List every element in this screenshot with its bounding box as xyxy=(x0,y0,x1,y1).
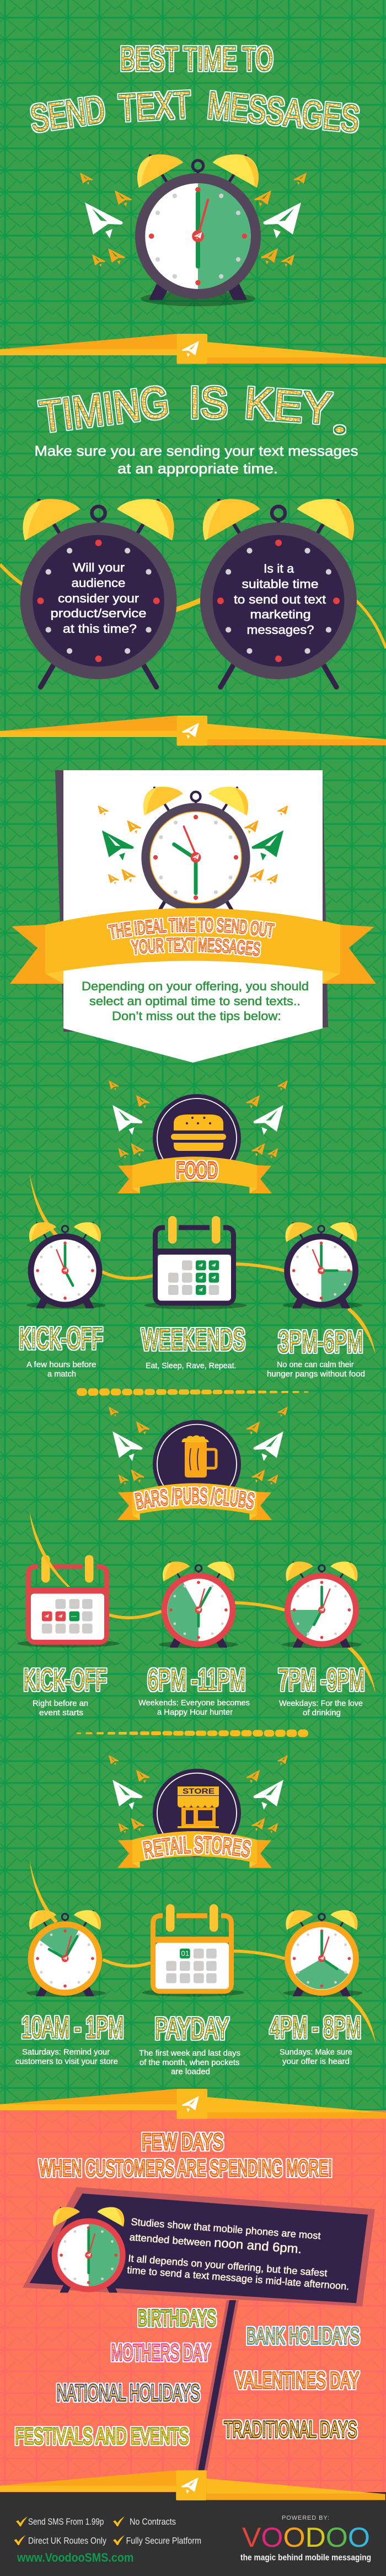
food tip: weekends xyxy=(142,1323,245,1370)
clock question text: suitable time xyxy=(242,577,319,591)
tag: national holidays: NATIONAL HOLIDAYS xyxy=(56,2380,200,2406)
bars clock three xyxy=(282,1561,362,1648)
footer xyxy=(14,2515,371,2564)
hero alarm clock with paper planes xyxy=(80,154,307,306)
heading: few days xyxy=(39,2129,332,2181)
retail tip: 10am-1pm: customers to visit your store xyxy=(15,2057,118,2066)
food tip: weekends: WEEKENDS xyxy=(142,1323,245,1356)
card body text: select an optimal time to send texts.. xyxy=(89,994,301,1008)
title xyxy=(28,40,361,140)
ribbon: food xyxy=(117,1156,272,1193)
section: retail stores xyxy=(109,1755,288,1868)
connector lines bars xyxy=(109,1603,285,1618)
card white sheet xyxy=(63,770,323,1063)
swoosh line left retail xyxy=(30,1860,58,1923)
title line two xyxy=(28,83,361,140)
ribbon label: BARS /PUBS /CLUBS xyxy=(133,1486,256,1511)
food tip: kick-off: a match xyxy=(47,1369,76,1379)
bars tip: kick-off: event starts xyxy=(39,1708,83,1718)
clock question text: audience xyxy=(72,576,126,590)
divider ribbon 2 xyxy=(0,716,386,746)
heading: timing is key xyxy=(37,377,345,441)
retail tip: 10am-1pm xyxy=(15,2011,124,2066)
retail clock one xyxy=(26,1910,106,1997)
tag: festivals and events: FESTIVALS AND EVENTS xyxy=(15,2423,189,2449)
paper plane burst xyxy=(98,806,288,884)
subtitle text: Make sure you are sending your text messages xyxy=(34,442,358,459)
tag: birthdays: BIRTHDAYS xyxy=(138,2305,216,2330)
paper plane burst xyxy=(109,1407,288,1485)
icon: store badge: STORE xyxy=(183,1786,215,1795)
swoosh line left bars xyxy=(30,1512,70,1587)
footer benefits list: Send SMS From 1.99p xyxy=(28,2516,104,2527)
ribbon label: RETAIL STORES xyxy=(141,1834,252,1860)
retail tip: 4pm-8pm: your offer is heard xyxy=(282,2057,350,2066)
clock question text: Will your xyxy=(73,561,125,574)
sign text: time to send a text message is mid-late afternoon. xyxy=(127,2264,350,2292)
swoosh line right retail xyxy=(347,1996,376,2042)
ribbon banner xyxy=(10,908,376,984)
sign text xyxy=(127,2216,350,2292)
clock question text xyxy=(51,561,147,636)
food tip: kick-off xyxy=(19,1322,103,1379)
footer benefits list: No Contracts xyxy=(130,2516,176,2527)
question clock left xyxy=(20,499,177,687)
footer benefits list: Fully Secure Platform xyxy=(126,2536,201,2546)
ribbon: bars xyxy=(117,1483,272,1520)
sign text: It all depends on your offering, but the safest xyxy=(128,2253,328,2279)
bars tip: 6pm-11pm xyxy=(138,1663,250,1717)
bars calendar xyxy=(17,1555,120,1647)
swoosh line right bars xyxy=(347,1646,376,1693)
food tip: kick-off: A few hours before xyxy=(26,1360,96,1369)
card body text: Depending on your offering, you should xyxy=(82,979,309,993)
retail tip: payday: of the month, when pockets xyxy=(140,2058,239,2067)
bars clock two xyxy=(159,1561,238,1648)
retail tip: payday: The first week and last days xyxy=(139,2049,240,2058)
clock question text: product/service xyxy=(51,606,147,620)
paper plane burst xyxy=(80,173,307,267)
bars tip: 7pm-9pm: Weekdays: For the love xyxy=(279,1699,363,1708)
food tip: kick-off: KICK-OFF xyxy=(19,1322,103,1355)
connector lines food xyxy=(102,1264,285,1278)
bars calendar: event xyxy=(71,1615,77,1618)
heading: timing is key: KEY xyxy=(243,378,334,433)
sign board frame xyxy=(23,2187,375,2306)
divider ribbon 3 xyxy=(0,2089,386,2119)
section: food xyxy=(109,1080,288,1193)
paper plane burst xyxy=(109,1755,288,1833)
signpost stake xyxy=(195,2300,239,2470)
sign text: attended between noon and 6pm. xyxy=(129,2229,302,2256)
bars tip: 7pm-9pm xyxy=(278,1663,364,1718)
clock question text: Is it a xyxy=(264,562,294,575)
swoosh line left food xyxy=(30,1174,58,1236)
retail tip: payday: are loaded xyxy=(171,2067,210,2077)
title line one: BEST TIME TO xyxy=(120,40,273,77)
sign text: Studies show that mobile phones are most xyxy=(131,2216,321,2242)
subtitle text xyxy=(34,442,358,477)
panel: ideal time card xyxy=(10,770,376,1063)
heading: timing is key: TIMING xyxy=(37,377,171,441)
food tip: 3pm-6pm: No one can calm their xyxy=(277,1360,354,1369)
title line two: TEXT xyxy=(118,83,192,129)
powered by label: POWERED BY: xyxy=(282,2515,329,2521)
footer benefits list xyxy=(14,2516,201,2546)
food calendar xyxy=(144,1216,247,1309)
clock question text: to send out text xyxy=(234,593,326,606)
retail calendar xyxy=(142,1904,244,1997)
bars tip: kick-off xyxy=(24,1663,106,1718)
retail tip: 4pm-8pm xyxy=(270,2011,361,2066)
food tip: 3pm-6pm: hunger pangs without food xyxy=(267,1369,365,1379)
divider ribbon 1 xyxy=(0,334,386,364)
bars tip: 6pm-11pm: Weekends: Everyone becomes xyxy=(138,1698,250,1708)
clock xyxy=(141,787,250,917)
food clock three xyxy=(283,1222,362,1309)
ribbon heading xyxy=(107,916,276,958)
section: bars pubs clubs xyxy=(109,1407,288,1520)
swoosh line right food xyxy=(347,1308,376,1354)
icon: store badge xyxy=(153,1769,241,1857)
connector lines retail xyxy=(103,1951,285,1966)
retail calendar: 01 xyxy=(181,1949,189,1958)
title line two: SEND xyxy=(28,88,108,140)
retail tip: payday: PAYDAY xyxy=(155,2012,229,2045)
tag: mothers day: MOTHERS DAY xyxy=(111,2339,210,2365)
background: footer dark panel xyxy=(0,2492,386,2576)
bars tip: kick-off: Right before an xyxy=(33,1699,88,1708)
food clock one xyxy=(26,1222,106,1309)
card back sheet xyxy=(55,770,328,1032)
subtitle text: at an appropriate time. xyxy=(117,460,278,477)
card body text: Don’t miss out the tips below: xyxy=(112,1009,281,1023)
signpost xyxy=(23,2187,375,2470)
divider ribbon 4 xyxy=(0,2470,385,2500)
clock question text xyxy=(234,562,326,637)
food tip: weekends: Eat, Sleep, Rave, Repeat. xyxy=(146,1361,236,1370)
clock question text: marketing xyxy=(250,607,311,621)
ribbon heading: THE IDEAL TIME TO SEND OUT xyxy=(107,916,276,940)
food tip: 3pm-6pm xyxy=(267,1325,365,1379)
question clock right xyxy=(200,499,357,687)
dashed tapered divider xyxy=(77,1388,308,1396)
background: coral envelope pattern xyxy=(0,2110,386,2492)
sign clock xyxy=(52,2207,126,2292)
bars tip: 6pm-11pm: a Happy Hour hunter xyxy=(157,1708,233,1717)
clock question text: messages? xyxy=(247,623,314,637)
heading: timing is key: IS xyxy=(189,378,228,427)
footer benefits list: Direct UK Routes Only xyxy=(28,2536,106,2546)
icon: burger badge xyxy=(153,1094,241,1182)
footer website link: www.VoodooSMS.com xyxy=(17,2551,133,2564)
ribbon heading: YOUR TEXT MESSAGES xyxy=(130,936,261,958)
paper plane burst xyxy=(109,1080,288,1159)
card body text xyxy=(82,979,309,1023)
ribbon label: FOOD xyxy=(176,1157,218,1183)
icon: beer mug badge xyxy=(153,1420,241,1508)
dashed tapered divider xyxy=(77,1729,308,1737)
ribbon: retail xyxy=(117,1831,272,1868)
clock question text: consider your xyxy=(58,591,139,605)
connecting curved lines behind clocks xyxy=(0,564,386,648)
bars tip: 7pm-9pm: of drinking xyxy=(303,1708,341,1718)
retail tip: 10am-1pm: 10AM - 1PM xyxy=(22,2011,124,2044)
retail tip: 4pm-8pm: Sundays: Make sure xyxy=(280,2047,352,2057)
sign board face xyxy=(30,2194,368,2303)
retail tip: 10am-1pm: Saturdays: Remind your xyxy=(22,2047,110,2057)
clock question text: at this time? xyxy=(63,622,137,636)
voodoo logo: VOODOO xyxy=(242,2522,370,2553)
clock body xyxy=(200,499,357,687)
retail clock three xyxy=(283,1910,363,1997)
bars tip: kick-off: KICK-OFF xyxy=(24,1663,106,1697)
clock body xyxy=(20,499,177,687)
bars tip: 6pm-11pm: 6PM -11PM xyxy=(148,1663,245,1697)
heading: few days: FEW DAYS xyxy=(142,2129,223,2154)
clock xyxy=(135,154,261,306)
retail tip: payday xyxy=(139,2012,240,2077)
